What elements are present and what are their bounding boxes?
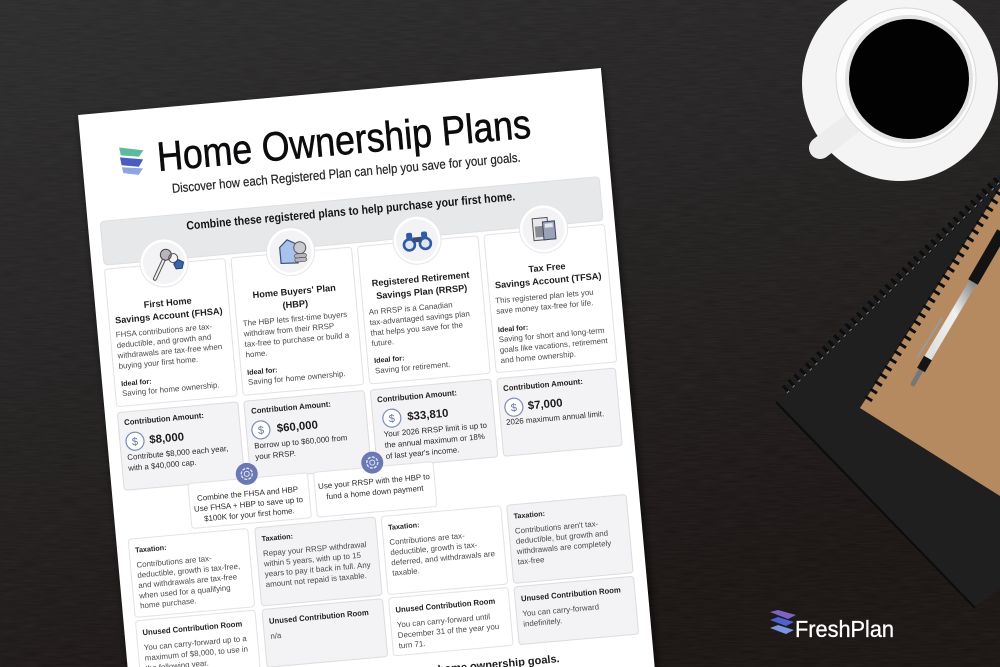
panel: TFSA: and home ownership. — [500, 349, 576, 365]
taxation: TFSA: Contributions aren't tax- — [515, 519, 599, 536]
subtitle: Discover how each Registered Plan can help you save for your goals. — [171, 150, 521, 196]
callout: RRSP + HBP: Use your RRSP with the HBP to — [318, 472, 431, 491]
panel: TFSA: Savings Account (TFSA) — [495, 271, 602, 290]
unused room: HBP: n/a — [270, 631, 282, 641]
taxation: HBP: within 5 years, with up to 15 — [262, 551, 362, 569]
contribution: HBP: your RRSP. — [255, 449, 296, 461]
panel: TFSA — [482, 199, 617, 373]
taxation: HBP: Taxation: — [261, 531, 293, 543]
contribution: RRSP: Your 2026 RRSP limit is up to — [383, 421, 488, 439]
icon: gear — [360, 451, 384, 475]
contribution: TFSA: Contribution Amount: — [503, 377, 583, 393]
panel: FHSA: Saving for home ownership. — [122, 380, 220, 398]
unused room: RRSP: Unused Contribution Room — [395, 597, 496, 615]
taxation: RRSP: Contributions are tax- — [389, 531, 465, 547]
panel: RRSP: Registered Retirement — [371, 270, 470, 288]
infographic sheet — [78, 68, 663, 667]
panel: RRSP: tax-advantaged savings plan — [369, 309, 470, 327]
contribution: RRSP: Contribution Amount: — [377, 388, 457, 404]
title: Home Ownership Plans — [155, 101, 533, 180]
panel: HBP: withdraw from their RRSP — [242, 321, 335, 339]
icon: binoculars — [391, 214, 443, 266]
unused room: HBP — [262, 599, 388, 667]
taxation: HBP: Repay your RRSP withdrawal — [263, 540, 367, 558]
contribution: FHSA: Contribute $8,000 each year, — [127, 444, 229, 462]
icon: house and coins — [265, 225, 317, 278]
taxation: FHSA: home purchase. — [140, 596, 197, 610]
panel: FHSA: deductible, and growth and — [116, 333, 212, 350]
pen — [913, 232, 1000, 384]
unused room: HBP: Unused Contribution Room — [269, 608, 369, 626]
contribution: FHSA — [117, 402, 245, 490]
contribution: FHSA: $8,000 — [149, 431, 185, 446]
unused room: TFSA — [514, 576, 639, 645]
icon: gear — [235, 462, 259, 486]
panel: TFSA: goals like vacations, retirement — [499, 336, 609, 355]
panel: TFSA: Saving for short and long-term — [498, 326, 605, 344]
contribution: TFSA — [497, 368, 622, 456]
taxation: RRSP — [381, 506, 508, 595]
FreshPlan logo — [770, 610, 894, 642]
combine banner: Combine these registered plans to help purchase your first home. — [186, 189, 516, 233]
panel: HBP: (HBP) — [282, 298, 308, 310]
callout: FHSA + HBP: Use FHSA + HBP to save up to — [194, 495, 304, 514]
panel: TFSA: Tax Free — [528, 261, 566, 274]
contribution: HBP: $60,000 — [276, 419, 318, 435]
coffee cup on saucer — [802, 0, 998, 181]
taxation: FHSA: and withdrawals are tax-free — [138, 572, 238, 590]
icon: dollar: $ — [131, 436, 139, 448]
taxation: HBP: years to pay it back in full. Any — [264, 560, 371, 579]
taxation: TFSA: withdrawals are completely — [515, 539, 612, 556]
unused room: RRSP — [388, 587, 513, 656]
taxation: RRSP: deductible, growth is tax- — [390, 540, 478, 557]
panel: HBP: Ideal for: — [247, 365, 278, 377]
callout: FHSA + HBP — [187, 457, 311, 528]
taxation: FHSA: Contributions are tax- — [136, 554, 212, 570]
panel: FHSA: First Home — [143, 296, 192, 310]
panel: RRSP: future. — [371, 337, 394, 348]
unused room: FHSA — [135, 610, 260, 667]
taxation: FHSA: when used for a qualifying — [138, 583, 231, 601]
paper shadow — [78, 70, 660, 667]
contribution: HBP: Contribution Amount: — [251, 400, 331, 416]
contribution: TFSA: 2026 maximum annual limit. — [506, 409, 604, 427]
taxation: RRSP: Taxation: — [388, 520, 420, 532]
unused room: FHSA: Unused Contribution Room — [142, 619, 243, 637]
combine banner — [100, 177, 603, 265]
icon: dollar: $ — [388, 413, 396, 425]
FreshPlan logo: FreshPlan — [795, 616, 894, 642]
taxation: HBP: amount not repaid is taxable. — [265, 571, 367, 589]
taxation: RRSP: deferred, and withdrawals are — [391, 549, 496, 567]
unused room: TFSA: indefinitely. — [523, 616, 562, 629]
contribution: RRSP: of last year's income. — [385, 445, 460, 461]
kraft notebook — [860, 188, 1000, 496]
contribution: TFSA: $7,000 — [527, 397, 563, 412]
contribution: FHSA: with a $40,000 cap. — [127, 458, 197, 473]
panel: RRSP: Savings Plan (RRSP) — [376, 283, 468, 301]
unused room: TFSA: Unused Contribution Room — [521, 585, 621, 603]
taxation: RRSP: taxable. — [392, 566, 420, 578]
panel: RRSP: An RRSP is a Canadian — [368, 300, 453, 317]
brand mark — [119, 145, 146, 176]
panel: RRSP: Ideal for: — [374, 353, 405, 365]
panel: RRSP: Saving for retirement. — [375, 360, 451, 375]
unused room: TFSA: You can carry-forward — [522, 602, 599, 618]
unused room: FHSA: You can carry-forward up to a — [143, 634, 248, 652]
contribution: RRSP: the annual maximum or 18% — [384, 432, 485, 450]
contribution: RRSP — [370, 379, 498, 468]
unused room: RRSP: You can carry-forward until — [396, 612, 491, 630]
black spiral notebook — [776, 174, 1000, 608]
callout: FHSA + HBP: Combine the FHSA and HBP — [197, 485, 298, 503]
panel: FHSA: Savings Account (FHSA) — [115, 306, 223, 325]
panel: TFSA: This registered plan lets you — [495, 288, 594, 305]
panel: RRSP: that helps you save for the — [370, 320, 464, 338]
panel: HBP — [229, 222, 364, 395]
panel: HBP: The HBP lets first-time buyers — [242, 310, 348, 328]
panel: FHSA: Ideal for: — [121, 377, 152, 388]
callout: RRSP + HBP: fund a home down payment — [326, 484, 425, 501]
panel: TFSA: Ideal for: — [497, 323, 529, 334]
panel: RRSP — [355, 211, 490, 384]
contribution: FHSA: Contribution Amount: — [124, 411, 204, 427]
panel: HBP: home. — [245, 349, 268, 359]
contribution: HBP — [244, 391, 371, 479]
icon: dollar: $ — [510, 402, 518, 414]
contribution: HBP: Borrow up to $60,000 from — [254, 433, 348, 451]
unused room: FHSA: maximum of $8,000, to use in — [144, 644, 248, 663]
taxation: TFSA: tax-free — [517, 555, 545, 566]
icon: key — [138, 237, 190, 289]
panel: FHSA: FHSA contributions are tax- — [115, 322, 213, 339]
panel: HBP: Saving for home ownership. — [248, 369, 346, 387]
callout: RRSP + HBP — [312, 446, 437, 517]
panel: HBP: Home Buyers' Plan — [252, 283, 336, 300]
taxation: TFSA — [507, 495, 633, 583]
unused room: RRSP: turn 71. — [398, 639, 426, 650]
taxation: TFSA: deductible, but growth and — [515, 529, 608, 546]
panel: HBP: tax-free to purchase or build a — [244, 331, 350, 349]
taxation: HBP — [255, 517, 382, 606]
callout: FHSA + HBP: $100K for your first home. — [204, 506, 295, 523]
panel: FHSA: buying your first home. — [118, 355, 199, 371]
icon: dollar: $ — [257, 425, 265, 437]
panel: TFSA: save money tax-free for life. — [496, 298, 594, 316]
icon: calculator — [517, 203, 570, 255]
unused room: RRSP: December 31 of the year you — [397, 622, 500, 640]
contribution: RRSP: $33,810 — [407, 408, 449, 423]
taxation: FHSA: Taxation: — [135, 543, 167, 555]
panel: FHSA — [102, 234, 237, 407]
taxation: TFSA: Taxation: — [513, 509, 545, 521]
taxation: FHSA: deductible, growth is tax-free, — [137, 562, 240, 580]
taxation: FHSA — [128, 528, 255, 617]
panel: FHSA: withdrawals are tax-free when — [116, 342, 223, 360]
